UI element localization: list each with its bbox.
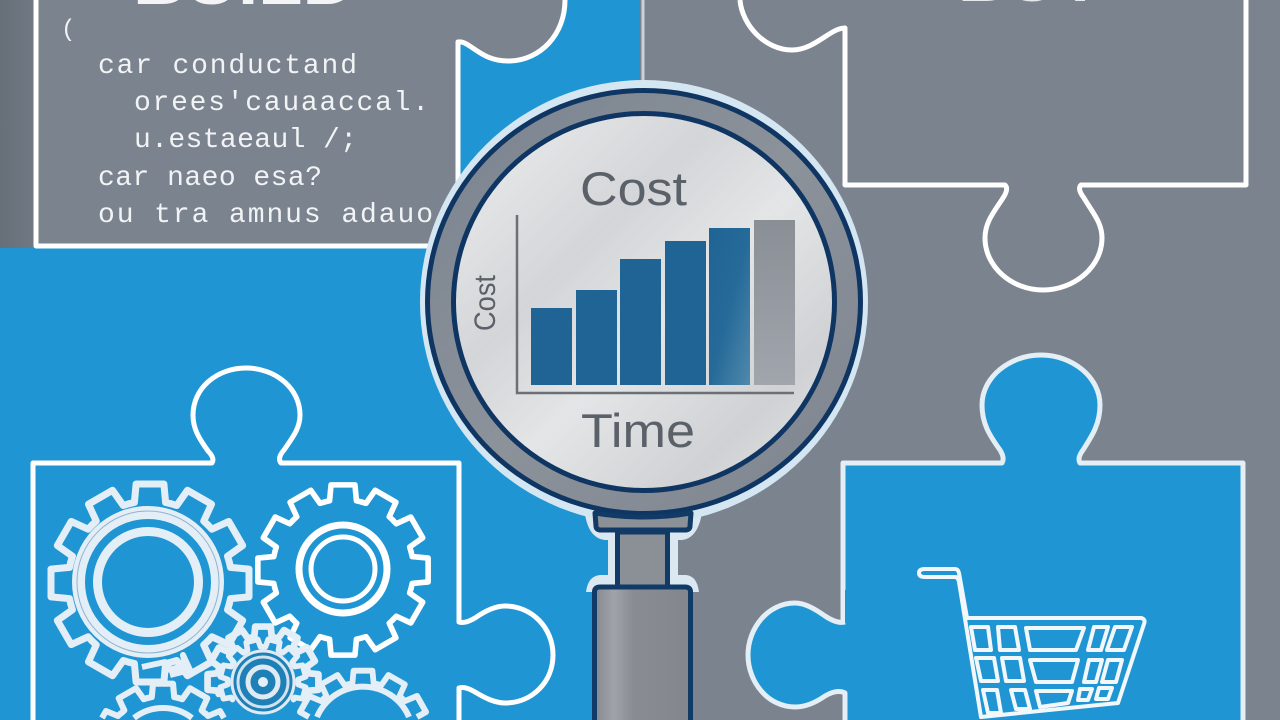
magnifier handle: [594, 513, 691, 720]
bar chart: [517, 215, 795, 393]
code text block: u.estaeaul /;: [134, 125, 357, 156]
gear: lower right: [300, 671, 426, 717]
background: left gray strip: [0, 0, 40, 248]
code text block: car naeo esa?: [98, 163, 322, 194]
gear: medium: [258, 485, 428, 655]
lens frame: [420, 80, 868, 524]
gear: fragment: [142, 655, 190, 675]
code text block: car conductand: [98, 51, 357, 82]
code text block: ou tra amnus adauo: [98, 200, 433, 231]
code text block: [61, 17, 433, 231]
puzzle piece: build code (top left): [36, 0, 565, 246]
icon: shopping cart: [919, 569, 1145, 717]
background: blue field: [0, 0, 640, 720]
x axis label: time: Time: [581, 404, 695, 457]
magnifying glass: [420, 80, 868, 720]
gear: large: [51, 484, 249, 682]
chart title: cost: Cost: [580, 162, 687, 215]
icon: gears: [51, 484, 428, 718]
lens glass: [456, 116, 832, 488]
puzzle piece: cart (bottom right): [748, 355, 1243, 720]
puzzle piece: gears (bottom left): [33, 368, 553, 720]
y axis label: Cost: [469, 274, 502, 331]
gear: lower left: [102, 684, 224, 718]
puzzle piece: buy (top right): [740, 0, 1246, 290]
code text block: (: [61, 17, 75, 44]
handle halo: [584, 505, 703, 592]
code text block: orees'cauaaccal.: [134, 88, 429, 119]
gear: small centre: [208, 627, 318, 713]
